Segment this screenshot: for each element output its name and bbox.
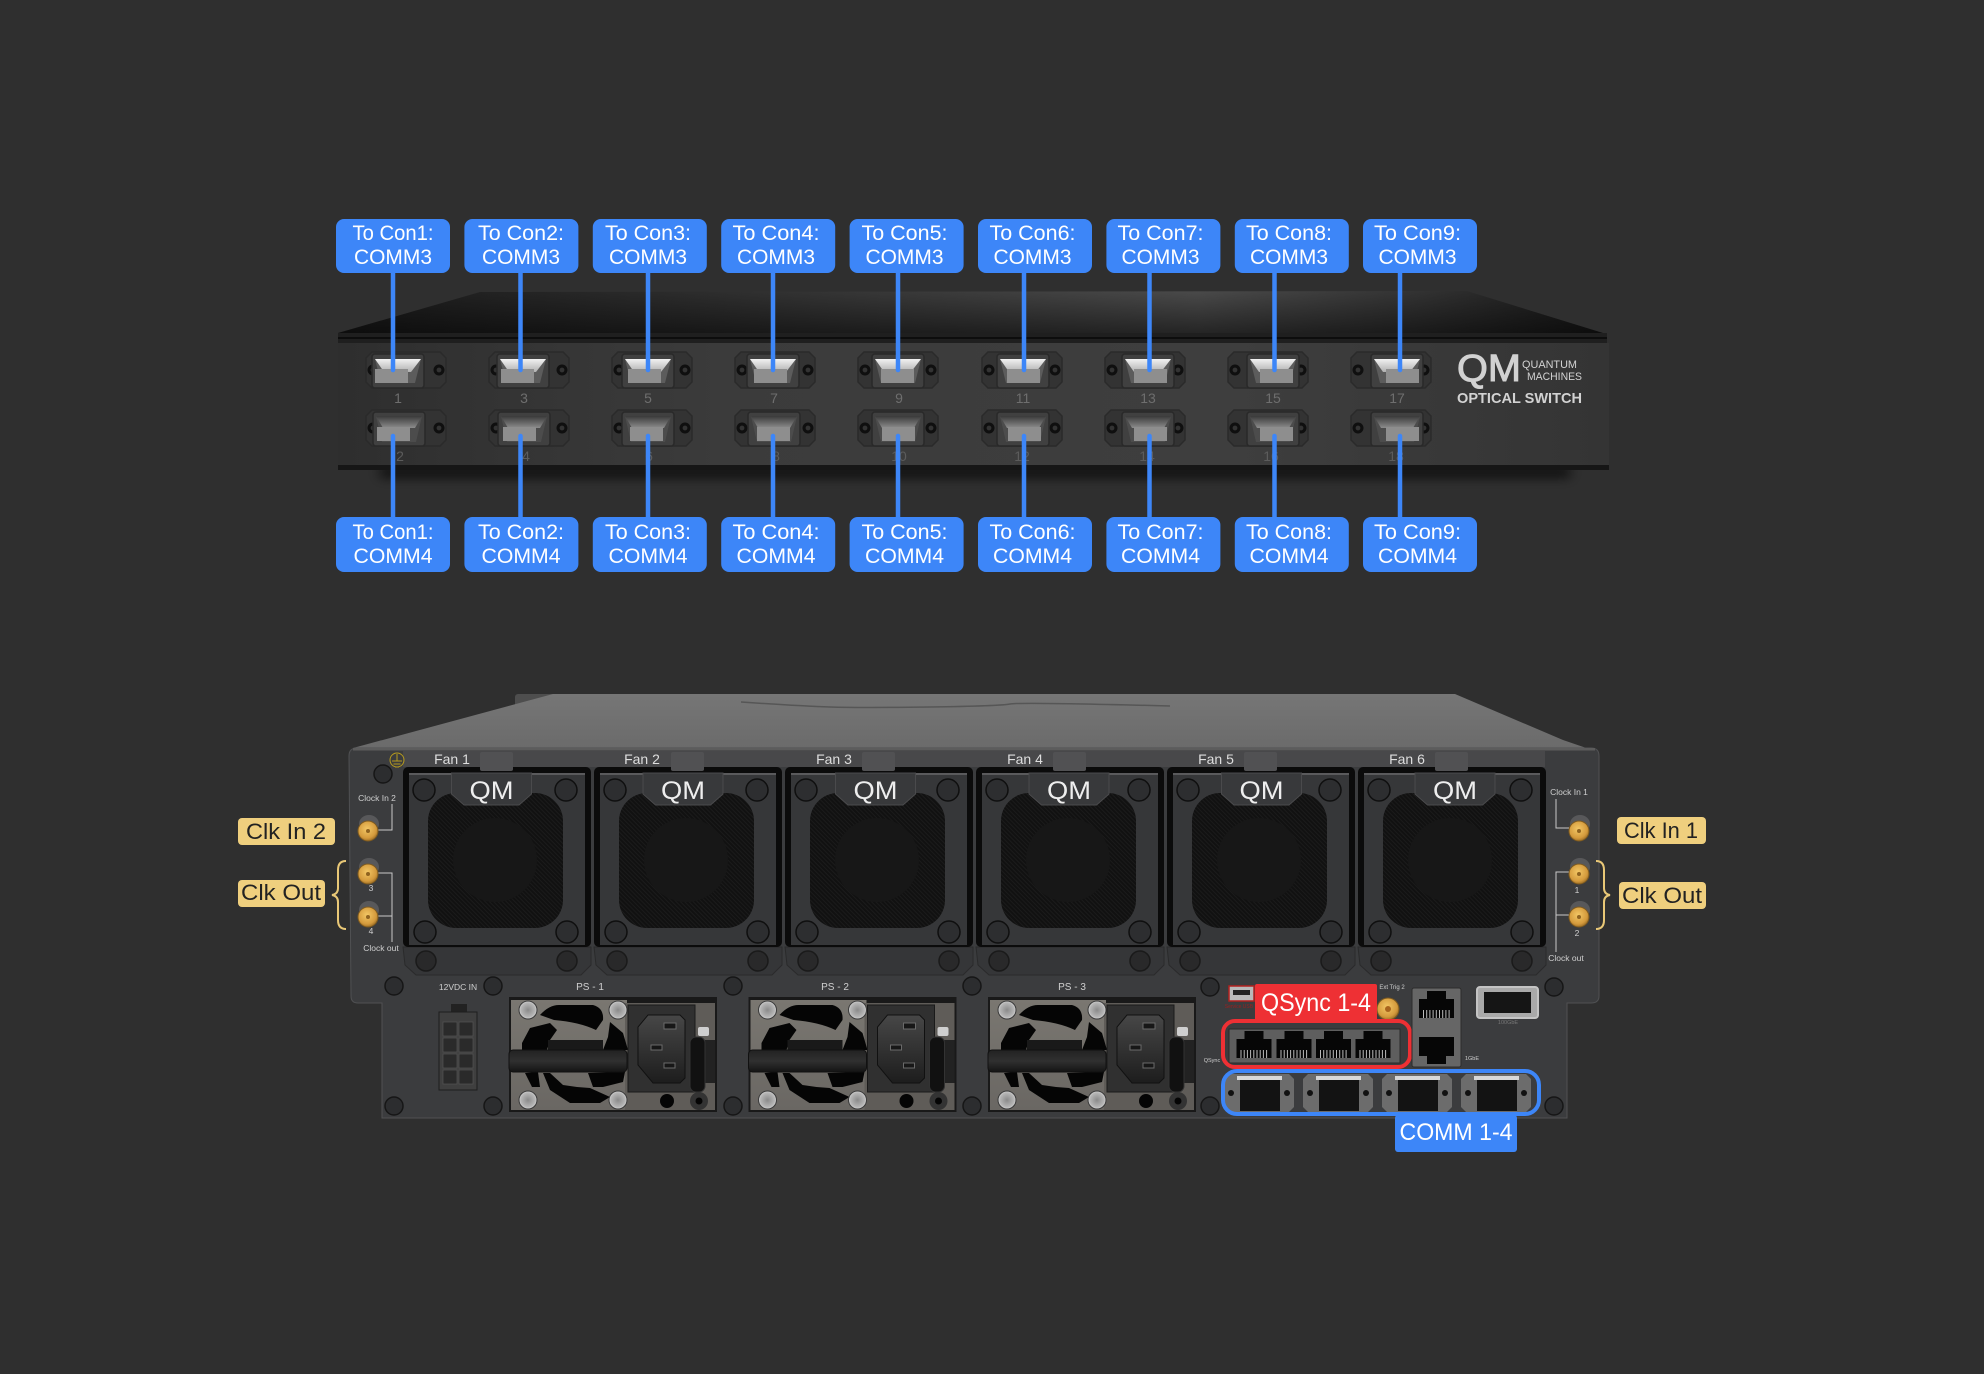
logo: QM Quantum Machines Optical Switch [1457,348,1582,407]
callout: To Con6 COMM4: COMM4 [993,545,1072,568]
callout: To Con1 COMM3: COMM3 [354,246,432,269]
port 5: 5 [644,390,652,406]
callout: To Con9 COMM4 [1363,436,1477,572]
callout: To Con5 COMM4: To Con5: [862,521,948,544]
port 17: 17 [1389,390,1405,406]
callout: To Con6 COMM4: To Con6: [990,521,1076,544]
power supply PS-1: PS - 1 [576,982,604,993]
ports: 1GbE dual ethernet: 1GbE [1465,1056,1479,1062]
port 9: 9 [895,390,903,406]
badge: Clk Out left: Clk Out [241,880,321,905]
callout: To Con8 COMM3: COMM3 [1250,246,1328,269]
port 10: 10 [891,448,907,464]
callout: To Con3 COMM3 [593,219,707,370]
port 4 [489,410,569,464]
fan 2 [594,751,782,975]
power supply PS-3 [988,982,1196,1112]
badge: Clk Out right: Clk Out [1622,883,1702,908]
callout: To Con5 COMM3 [850,219,964,370]
port 16: 16 [1263,448,1279,464]
highlight: QSync box [1223,1021,1410,1067]
port: service USB: Service USB 1 [1225,1004,1257,1010]
clock connectors: left side: 3 [369,883,374,893]
port 18: 18 [1388,448,1404,464]
port: 100GbE QSFP: 100GbE [1498,1020,1518,1026]
panel: controller rear chassis [349,694,1599,1118]
port 4: 4 [522,448,530,464]
port: 100GbE QSFP [1477,987,1538,1026]
callout: To Con7 COMM3: To Con7: [1118,222,1204,245]
connector: Ext Trig gold SMA [1377,985,1405,1020]
connector: 12VDC input [439,982,477,1090]
clock connectors: right side: Clock In 1 [1550,787,1588,797]
callout: To Con7 COMM3: COMM3 [1122,246,1200,269]
port 8: 8 [772,448,780,464]
ports: 1GbE dual ethernet [1412,988,1479,1067]
badge: QSync 1-4: QSync 1-4 [1261,989,1371,1017]
port 6 [612,410,692,464]
port 6: 6 [645,448,653,464]
callout: To Con4 COMM3: To Con4: [732,222,820,245]
callout: To Con8 COMM3: To Con8: [1246,222,1332,245]
bracket: right Clk Out [1596,861,1610,929]
port 11 [982,352,1062,406]
callout: To Con3 COMM3: To Con3: [605,222,691,245]
fan 1: QM [470,777,514,805]
callout: To Con1 COMM4 [336,436,450,572]
port 9 [858,352,938,406]
icon: ground symbol and screw [374,753,404,783]
callout: To Con7 COMM4 [1106,436,1220,572]
power supply PS-2: PS - 2 [821,982,849,993]
port 11: 11 [1016,390,1030,406]
fan 2: Fan 2 [624,751,660,767]
connector: 12VDC input: 12VDC IN [439,982,477,992]
fan 5: Fan 5 [1198,751,1234,767]
callout: To Con6 COMM4 [978,436,1092,572]
logo: QM Quantum Machines Optical Switch: OPTICAL SWITCH [1457,390,1582,407]
callout: To Con2 COMM4: COMM4 [482,545,561,568]
fan 1: Fan 1 [434,751,470,767]
callout: To Con3 COMM4 [593,436,707,572]
port 17 [1351,352,1431,406]
port 8 [735,410,815,464]
port 2: 2 [396,448,404,464]
callout: To Con8 COMM4 [1235,436,1349,572]
power supply PS-1 [509,982,717,1112]
callout: To Con5 COMM4 [850,436,964,572]
port 12 [982,410,1062,464]
fans: six fan modules [403,751,1546,975]
callout: To Con9 COMM4: COMM4 [1378,545,1457,568]
port 3 [489,352,569,406]
port 18 [1351,410,1431,464]
callout: To Con4 COMM3 [721,219,835,370]
callout: To Con8 COMM4: To Con8: [1246,521,1332,544]
callout: To Con7 COMM3 [1106,219,1220,370]
callout: To Con2 COMM3: COMM3 [482,246,560,269]
callout: To Con1 COMM4: COMM4 [354,545,433,568]
power supply PS-2 [748,982,956,1112]
bracket: left Clk Out [332,861,346,929]
port 2 [366,410,446,464]
callout: To Con2 COMM4: To Con2: [478,521,564,544]
callout: To Con4 COMM4: To Con4: [732,521,820,544]
fan 4 [976,751,1164,975]
ports: QSync ethernet [1204,1029,1400,1064]
callout: To Con7 COMM4: To Con7: [1118,521,1204,544]
port 1: 1 [394,390,402,406]
fan 6: QM [1433,777,1477,805]
fan 3: QM [854,777,898,805]
callout: To Con5 COMM4: COMM4 [865,545,944,568]
callout: To Con6 COMM3 [978,219,1092,370]
port 1 [366,352,446,406]
callout: To Con2 COMM3: To Con2: [478,222,564,245]
callout: To Con9 COMM3: COMM3 [1378,246,1456,269]
callout: To Con5 COMM3: To Con5: [862,222,948,245]
callout: To Con7 COMM4: COMM4 [1121,545,1200,568]
callout: To Con4 COMM3: COMM3 [737,246,815,269]
fan 6: Fan 6 [1389,751,1425,767]
callout: To Con4 COMM4 [721,436,835,572]
fan 5: QM [1240,777,1284,805]
badge: Clk In 1: Clk In 1 [1624,818,1698,843]
ports: QSync ethernet: QSync [1204,1058,1220,1064]
callout: To Con4 COMM4: COMM4 [736,545,816,568]
port: service USB [1225,986,1257,1010]
callout: To Con3 COMM3: COMM3 [609,246,687,269]
logo: QM Quantum Machines Optical Switch: QUANTUM [1522,359,1577,371]
fan 4: QM [1047,777,1091,805]
callout: To Con5 COMM3: COMM3 [866,246,944,269]
fan 3: Fan 3 [816,751,852,767]
clock connectors: right side [1548,787,1590,963]
port 15: 15 [1265,390,1281,406]
callout: To Con9 COMM3: To Con9: [1374,222,1461,245]
clock connectors: right side: Clock out [1548,953,1584,963]
clock connectors: left side: 4 [369,926,374,936]
port 7: 7 [770,390,778,406]
callout: To Con9 COMM4: To Con9: [1374,521,1461,544]
fan 2: QM [661,777,705,805]
port 14: 14 [1139,448,1155,464]
port 14 [1105,410,1185,464]
port 7 [735,352,815,406]
clock connectors: right side: 2 [1575,928,1580,938]
port 5 [612,352,692,406]
port 13 [1105,352,1185,406]
port 12: 12 [1014,448,1030,464]
callout: To Con9 COMM3 [1363,219,1477,370]
ports: COMM SFP cages [1224,1074,1531,1112]
badge: Clk In 2: Clk In 2 [246,819,326,844]
port 10 [858,410,938,464]
badge: COMM 1-4: COMM 1-4 [1400,1119,1512,1146]
callout: To Con2 COMM3 [464,219,578,370]
connector: Ext Trig gold SMA: Ext Trig 2 [1379,985,1405,991]
logo: QM Quantum Machines Optical Switch: QM [1457,348,1521,390]
callouts: top row COMM3 [336,219,1477,370]
callouts: bottom row COMM4 [336,436,1477,572]
clock connectors: right side: 1 [1575,885,1580,895]
callout: To Con1 COMM3 [336,219,450,370]
highlight: COMM box [1223,1071,1539,1114]
fan 3 [785,751,973,975]
fan 4: Fan 4 [1007,751,1043,767]
callout: To Con6 COMM3: To Con6: [990,222,1076,245]
ports: optical switch sockets 1 to 18 [366,352,1431,464]
clock connectors: left side [358,793,399,953]
panel: optical switch chassis [338,291,1609,476]
clock connectors: left side: Clock out [363,943,399,953]
port 13: 13 [1140,390,1156,406]
screws: lower plate [385,977,1563,1115]
power supply PS-3: PS - 3 [1058,982,1086,993]
callout: To Con2 COMM4 [464,436,578,572]
clock connectors: left side: Clock In 2 [358,793,396,803]
logo: QM Quantum Machines Optical Switch: MACHINES [1527,371,1582,383]
port 16 [1228,410,1308,464]
port 3: 3 [520,390,528,406]
callout: To Con6 COMM3: COMM3 [994,246,1072,269]
callout: To Con3 COMM4: COMM4 [608,545,688,568]
fan 5 [1167,751,1355,975]
fan 6 [1358,751,1546,975]
callout: To Con8 COMM4: COMM4 [1250,545,1329,568]
callout: To Con1 COMM3: To Con1: [352,222,434,245]
callout: To Con8 COMM3 [1235,219,1349,370]
fan 1 [403,751,591,975]
port 15 [1228,352,1308,406]
callout: To Con1 COMM4: To Con1: [352,521,434,544]
callout: To Con3 COMM4: To Con3: [605,521,691,544]
